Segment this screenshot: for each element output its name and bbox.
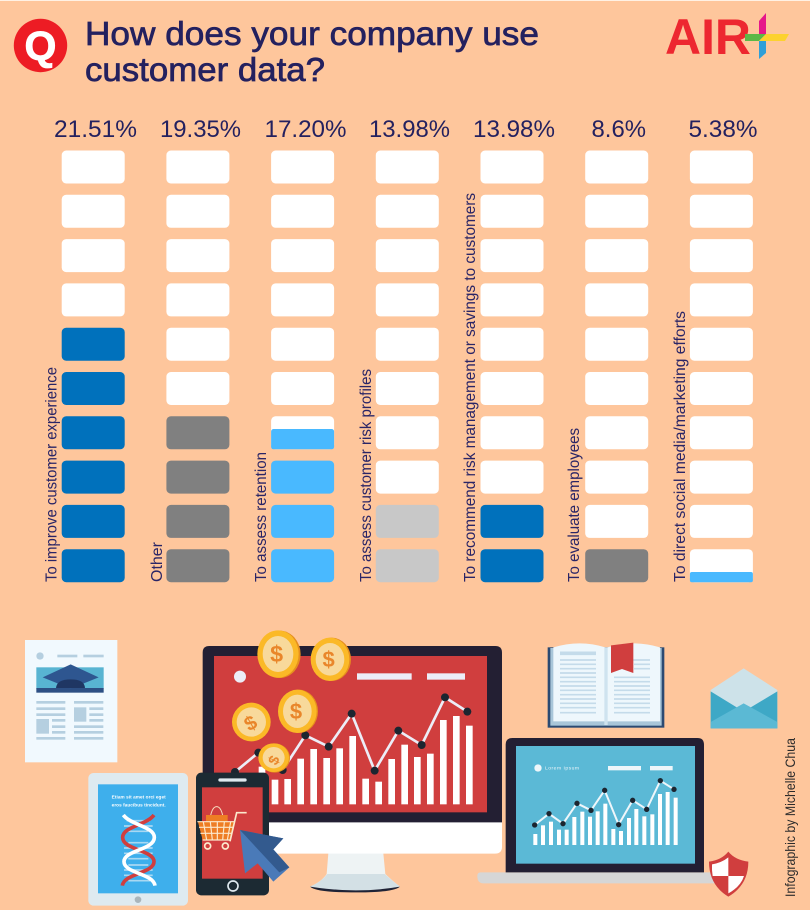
cursor arrow [240, 830, 289, 882]
icon: gold coins: $ [323, 647, 335, 672]
icon: gold coins: $ [266, 754, 284, 768]
monitor stand [310, 853, 400, 892]
percentage labels: 19.35% [160, 116, 241, 143]
bar column: Other 19.35%: Other [149, 542, 166, 582]
laptop bar chart [533, 792, 678, 845]
title: How does your company use [85, 15, 539, 52]
percentage labels: 21.51% [54, 116, 137, 143]
logo: AIR+ [665, 9, 789, 65]
monitor bar chart [259, 716, 473, 804]
icon: gold coins: $ [241, 711, 261, 736]
bar column: To assess customer risk profiles 13.98%: To assess customer risk profiles [358, 369, 375, 582]
icon: tablet with DNA [88, 773, 188, 906]
icon: Q badge [14, 19, 67, 72]
bar column: To direct social media/marketing efforts 5.38% [672, 150, 753, 582]
bar column: To assess retention 17.20% [253, 150, 334, 582]
icon: gold coins: $ [290, 699, 302, 724]
bar column: To recommend risk management or savings to customers 13.98%: To recommend risk management or savings to customers [462, 193, 479, 582]
bar column: Other 19.35% [149, 150, 229, 582]
icon: gold coins: $ [270, 641, 283, 667]
bar column: To improve customer experience 21.51% [44, 150, 125, 582]
credit: Infographic by Michelle Chua [783, 738, 798, 897]
bar column: To assess retention 17.20%: To assess retention [253, 452, 270, 582]
icon: Q badge: Q [25, 23, 56, 69]
percentage labels [54, 116, 758, 143]
title: customer data? [85, 51, 325, 88]
icon: smartphone with shopping cart [196, 773, 289, 895]
icon: laptop with chart [477, 738, 723, 883]
icon: laptop with chart: Lorem Ipsum [545, 766, 579, 772]
bar column: To direct social media/marketing efforts 5.38%: To direct social media/marketing efforts [672, 311, 689, 582]
percentage labels: 17.20% [264, 116, 346, 143]
bar column: To recommend risk management or savings to customers 13.98% [462, 150, 544, 582]
logo: AIR+: AIR [665, 9, 751, 65]
percentage labels: 13.98% [473, 116, 555, 143]
icon: desktop monitor with chart [203, 630, 502, 892]
bar column: To assess customer risk profiles 13.98% [358, 150, 439, 582]
bar column: To improve customer experience 21.51%: To improve customer experience [44, 367, 60, 582]
icon: document with graduation cap [25, 640, 117, 762]
icon: envelope [711, 668, 777, 728]
tablet caption [112, 795, 166, 808]
monitor line chart [231, 693, 471, 776]
percentage labels: 13.98% [369, 116, 450, 143]
laptop line chart [532, 778, 677, 828]
bar column: To evaluate employees 8.6% [566, 150, 648, 582]
shopping cart [197, 807, 247, 849]
percentage labels: 5.38% [688, 116, 758, 143]
icon: shield [709, 852, 748, 897]
DNA helix [122, 815, 155, 886]
percentage labels: 8.6% [592, 116, 646, 143]
icon: open book [548, 643, 664, 728]
icon: gold coins [232, 630, 351, 773]
tablet caption: Etiam sit amet orci eget [112, 795, 166, 800]
tablet caption: eros faucibus tincidunt. [112, 803, 166, 808]
title [85, 15, 539, 88]
bar column: To evaluate employees 8.6%: To evaluate employees [566, 428, 583, 582]
